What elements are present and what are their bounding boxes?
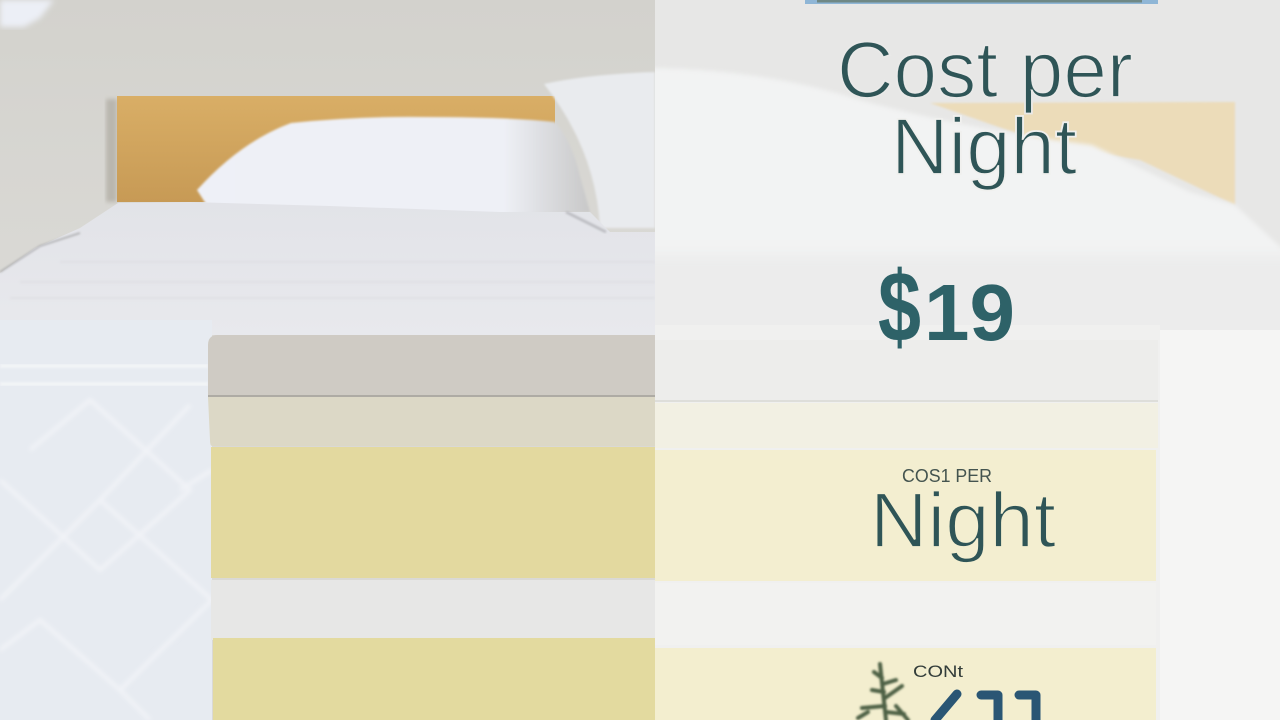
- bed sheets: [0, 202, 655, 335]
- heading: Night: Night: [870, 476, 1056, 564]
- heading: Cost per Night: Night: [891, 102, 1077, 191]
- back pillow: [544, 72, 655, 228]
- top bar: [805, 0, 1158, 4]
- heading: Cost per Night: [837, 25, 1133, 191]
- panel: faded right half: [630, 0, 1280, 720]
- pillow: [197, 117, 590, 216]
- icon: small tree: [858, 664, 908, 720]
- price: $19: $: [878, 251, 921, 363]
- mattress layers left: [208, 335, 655, 720]
- small label: cost per: COS1 PER: [902, 466, 992, 486]
- price: partial number: [935, 694, 1036, 720]
- faded mattress layers: [655, 400, 1158, 720]
- price: $19: 19: [924, 268, 1015, 357]
- small label: cont: CONt: [913, 662, 963, 681]
- faded bed: [630, 68, 1280, 720]
- faded headboard: [930, 102, 1235, 205]
- panel: bedroom photo, left half: [0, 0, 655, 720]
- price: $19: [878, 251, 1015, 363]
- icon: wall lamp: [0, 0, 54, 27]
- heading: Cost per Night: Cost per: [837, 25, 1133, 114]
- headboard: [106, 96, 555, 202]
- mattress side: [0, 320, 212, 720]
